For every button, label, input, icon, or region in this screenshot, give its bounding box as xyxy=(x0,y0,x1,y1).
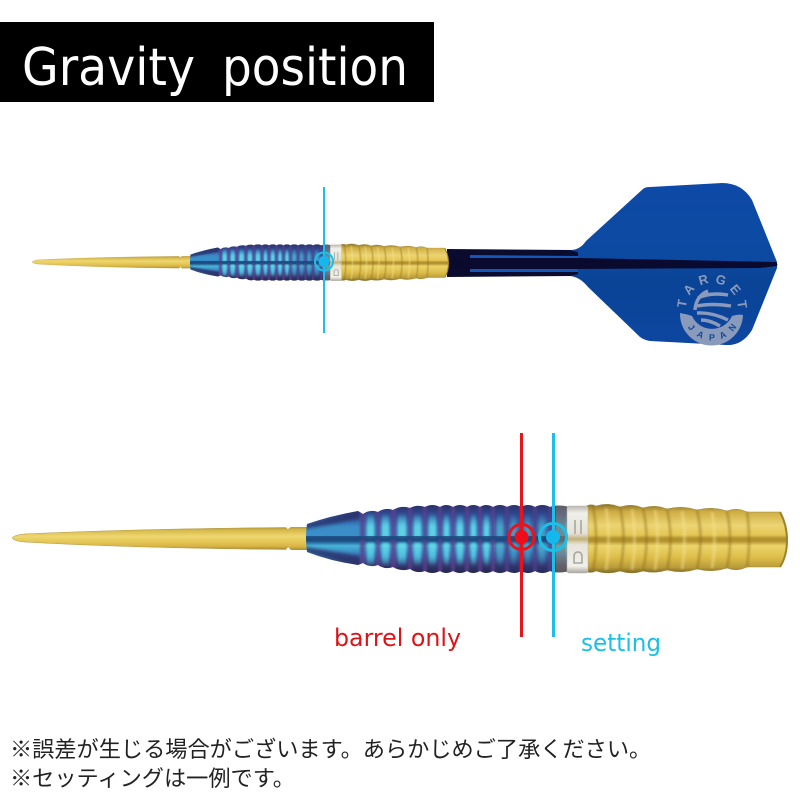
flight xyxy=(570,183,777,346)
title: position xyxy=(222,38,408,98)
footnote 1: ※誤差が生じる場合がございます。あらかじめご了承ください。 xyxy=(10,736,651,762)
footnote 2: ※セッティングは一例です。 xyxy=(10,766,295,791)
flight logo xyxy=(677,275,748,346)
flight logo: JAPAN xyxy=(688,324,736,340)
gravity marker on small dart xyxy=(315,187,333,333)
marker: barrel only xyxy=(509,433,534,637)
small dart xyxy=(32,242,449,283)
shaft xyxy=(447,249,777,277)
title bar xyxy=(0,22,434,102)
label: setting: setting xyxy=(581,629,661,657)
flight logo: TARGET xyxy=(677,275,748,308)
marker: setting xyxy=(540,433,566,637)
title: Gravity xyxy=(22,38,195,98)
footnotes xyxy=(10,736,651,791)
large barrel dart xyxy=(12,500,787,578)
label: barrel only: barrel only xyxy=(334,624,461,652)
whole dart with flight xyxy=(32,183,778,346)
